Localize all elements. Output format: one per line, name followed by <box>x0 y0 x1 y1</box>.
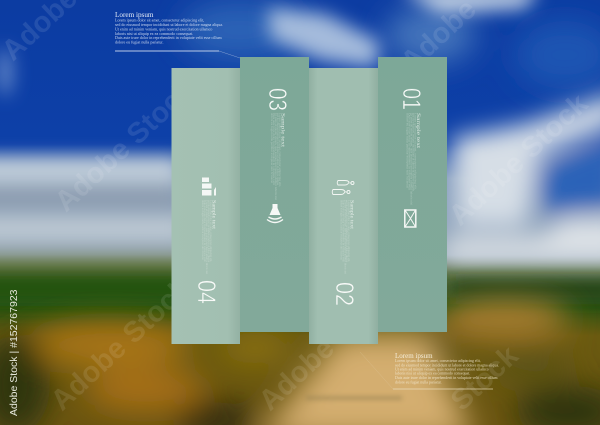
body text: top callout: sed do eiusmod tempor incididunt ut labore et dolore magna aliqua. <box>115 22 223 27</box>
body text: bottom callout: dolore eu fugiat nulla pariatur. <box>395 380 442 384</box>
heading: top callout: Lorem ipsum <box>115 11 154 19</box>
body text: top callout: Ut enim ad minim veniam, quis nostrud exercitation ullamco <box>115 26 212 32</box>
text: sample text 01: Ut enim ad minim veniam, quis nostrud exercitation ullamco laboris nisi <box>410 113 412 205</box>
icon: bar chart <box>202 178 216 196</box>
text: sample text 01: sed do eiusmod tempor incididunt ut labore et dolore magna <box>412 113 414 192</box>
text: sample text 01: Sample text <box>415 113 421 149</box>
text: sample text 02: Ut enim ad minim veniam, quis nostrud exercitation ullamco laboris nisi <box>344 200 346 274</box>
number 01: 01 <box>397 88 425 110</box>
text: sample text 03: Sample text <box>280 113 286 148</box>
body text: bottom callout: Ut enim ad minim veniam, quis nostrud exercitation ullamco <box>395 368 489 372</box>
number 02: 02 <box>330 282 358 306</box>
text: sample text 01: Lorem ipsum dolor sit amet, consectetur adipiscing elit, <box>414 113 416 190</box>
text: sample text 02: sed do eiusmod tempor incididunt ut labore et dolore magna <box>345 200 348 263</box>
icon: bell with sound waves <box>267 204 283 222</box>
text: sample text 04: Duis aute irure dolor in reprehenderit in voluptate velit <box>203 200 206 262</box>
text: sample text 03 <box>270 113 286 200</box>
text: sample text 01 <box>406 113 421 205</box>
text: sample text 03: sed do eiusmod tempor incididunt ut labore et dolore magna <box>276 113 279 186</box>
number 03: 03 <box>263 88 291 111</box>
text: sample text 02: Duis aute irure dolor in reprehenderit in voluptate velit <box>342 200 344 262</box>
panel 04 <box>172 68 240 344</box>
text: sample text 04: Ut enim ad minim veniam, quis nostrud exercitation ullamco laboris nisi <box>205 200 208 274</box>
text: sample text 04: Sample text <box>210 200 216 230</box>
text: sample text 01: Duis aute irure dolor in reprehenderit in voluptate velit <box>408 113 410 190</box>
watermark: Adobe Stock <box>45 272 197 417</box>
panel 03 <box>240 57 309 332</box>
body text: top callout <box>115 18 223 44</box>
text: sample text 04 <box>201 200 216 274</box>
body text: bottom callout: Lorem ipsum dolor sit amet, consectetur adipiscing elit, <box>395 359 481 364</box>
text: sample text 02: Sample text <box>348 200 354 230</box>
watermark: Adobe Stock <box>49 73 201 218</box>
leader line: bottom callout <box>360 352 493 389</box>
text: sample text 02 <box>340 200 354 274</box>
text: sample text 04: Lorem ipsum dolor sit amet, consectetur adipiscing elit, <box>209 200 212 262</box>
text: sample text 04: sed do eiusmod tempor incididunt ut labore et dolore magna <box>207 200 210 263</box>
text: sample text 02: dolore eu fugiat nulla pariatur excepteur sint occaecat <box>340 200 342 260</box>
body text: top callout: Duis aute irure dolor in reprehenderit in voluptate velit esse cillum <box>115 35 223 40</box>
body text: bottom callout: laboris nisi ut aliquip ex ea commodo consequat. <box>395 372 470 376</box>
number 04: 04 <box>192 280 220 304</box>
icon: two bottles <box>332 180 354 194</box>
stock id caption: Adobe Stock | #152767923 <box>8 289 20 416</box>
watermark: Adobe Stock <box>253 272 405 417</box>
heading: bottom callout: Lorem ipsum <box>395 352 433 360</box>
text: sample text 04: dolore eu fugiat nulla pariatur excepteur sint occaecat <box>201 200 204 260</box>
body text: top callout: dolore eu fugiat nulla pariatur. <box>115 40 164 44</box>
body text: bottom callout: Duis aute irure dolor in reprehenderit in voluptate velit esse cillum <box>395 376 497 380</box>
text: sample text 01: dolore eu fugiat nulla pariatur excepteur sint occaecat <box>406 113 408 188</box>
text: sample text 03: Ut enim ad minim veniam, quis nostrud exercitation ullamco laboris nisi <box>274 113 277 200</box>
panel 01 <box>378 57 447 332</box>
icon: envelope <box>405 210 416 227</box>
text: sample text 03: dolore eu fugiat nulla pariatur excepteur sint occaecat <box>270 113 273 183</box>
watermark: Adobe Stock <box>443 87 595 232</box>
body text: top callout: laboris nisi ut aliquip ex ea commodo consequat. <box>115 31 193 36</box>
panel 02 <box>309 68 378 344</box>
text: sample text 02: Lorem ipsum dolor sit amet, consectetur adipiscing elit, <box>347 200 350 262</box>
body text: bottom callout <box>395 359 499 384</box>
body text: bottom callout: sed do eiusmod tempor incididunt ut labore et dolore magna aliqua. <box>395 363 499 367</box>
leader line: top callout <box>115 51 240 58</box>
watermark: Stock <box>445 339 525 417</box>
watermark: Adobe Stock <box>198 127 350 272</box>
text: sample text 03: Lorem ipsum dolor sit amet, consectetur adipiscing elit, <box>278 113 281 187</box>
body text: top callout: Lorem ipsum dolor sit amet, consectetur adipiscing elit, <box>115 18 204 24</box>
text: sample text 03: Duis aute irure dolor in reprehenderit in voluptate velit <box>272 113 275 185</box>
